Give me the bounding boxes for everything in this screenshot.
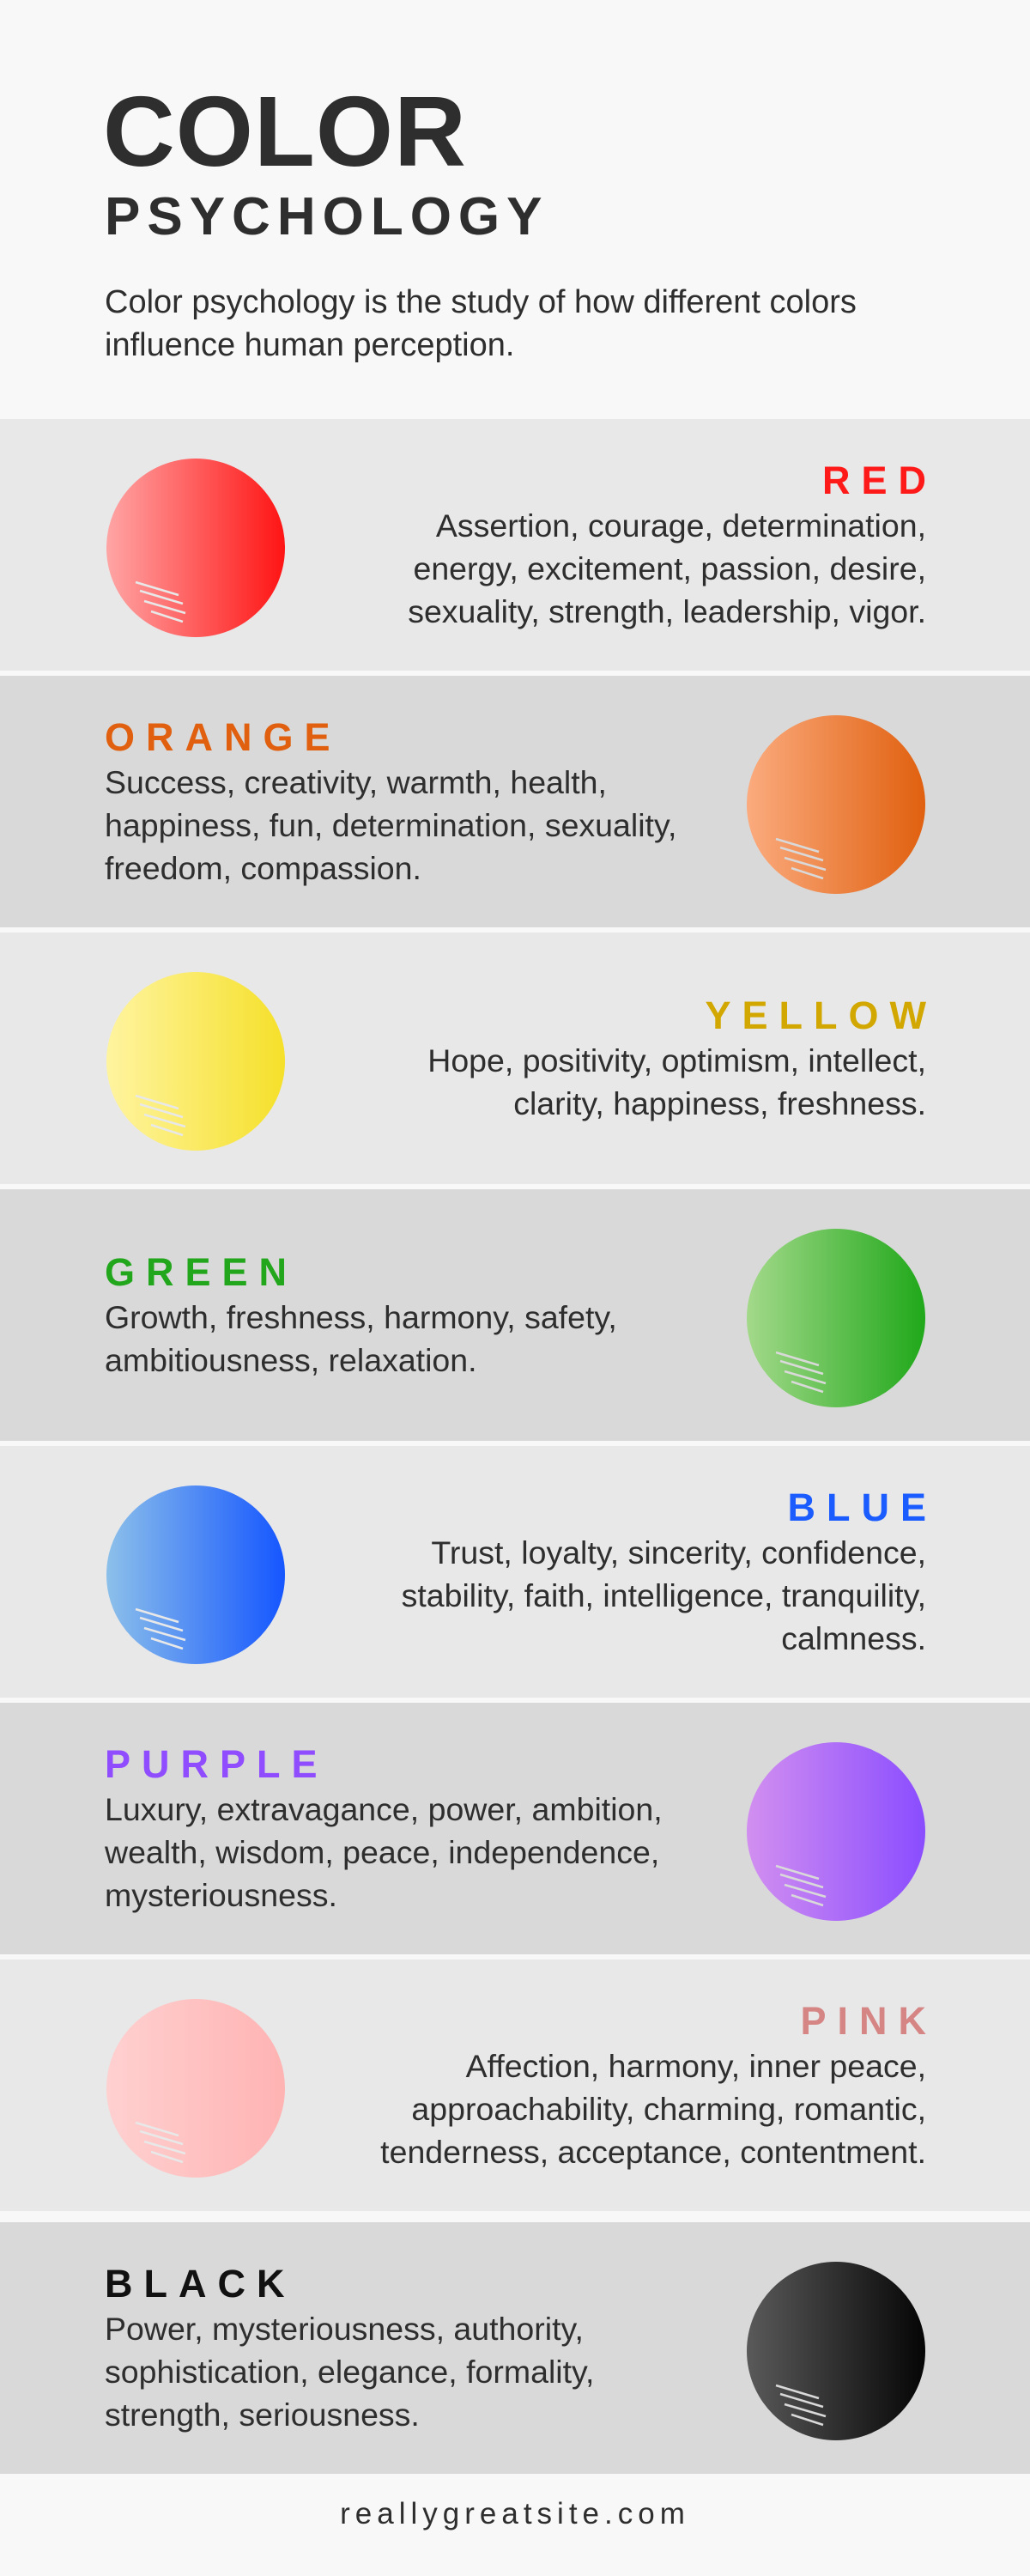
text: blue: calmness. — [781, 1619, 926, 1656]
text: blue: BLUE — [788, 1485, 937, 1528]
text: blue: stability, faith, intelligence, tranquility, — [402, 1577, 926, 1613]
intro text: Color psychology is the study of how different colors — [105, 284, 857, 320]
panel: black — [0, 2222, 1030, 2474]
text: orange: Success, creativity, warmth, health, — [105, 764, 607, 800]
intro text: influence human perception. — [105, 327, 514, 363]
text: blue: Trust, loyalty, sincerity, confidence, — [431, 1534, 926, 1570]
panel: pink — [0, 1959, 1030, 2211]
text: red — [408, 459, 937, 629]
text: orange: freedom, compassion. — [105, 850, 421, 886]
panel: blue — [0, 1446, 1030, 1698]
footer url: reallygreatsite.com — [340, 2497, 690, 2530]
text: pink: tenderness, acceptance, contentment. — [380, 2133, 926, 2169]
text: yellow: Hope, positivity, optimism, intellect, — [427, 1042, 926, 1078]
panel: orange — [0, 676, 1030, 927]
icon: green circle — [747, 1229, 925, 1407]
text: green: GREEN — [105, 1250, 298, 1293]
text: purple: Luxury, extravagance, power, ambition, — [105, 1791, 663, 1827]
text: purple: wealth, wisdom, peace, independence, — [105, 1834, 659, 1870]
text: pink — [380, 1999, 937, 2169]
icon: red circle — [106, 459, 285, 637]
text: red: Assertion, courage, determination, — [436, 507, 926, 543]
text: green: Growth, freshness, harmony, safety, — [105, 1298, 617, 1334]
panel: purple — [0, 1703, 1030, 1954]
icon: black circle — [747, 2262, 925, 2440]
text: blue — [402, 1485, 937, 1656]
text: red: sexuality, strength, leadership, vigor. — [408, 592, 926, 629]
text: orange — [105, 714, 676, 886]
text: pink: Affection, harmony, inner peace, — [466, 2047, 926, 2083]
text: pink: PINK — [800, 1999, 937, 2042]
text: green — [105, 1250, 617, 1377]
text: pink: approachability, charming, romantic, — [411, 2090, 926, 2126]
text: purple: PURPLE — [105, 1741, 329, 1786]
text: red: RED — [822, 459, 937, 501]
text: yellow: clarity, happiness, freshness. — [513, 1085, 926, 1121]
text: yellow — [427, 993, 937, 1121]
panel: red — [0, 419, 1030, 671]
text: green: ambitiousness, relaxation. — [105, 1341, 477, 1377]
text: black: sophistication, elegance, formality, — [105, 2353, 594, 2389]
text: red: energy, excitement, passion, desire, — [413, 550, 926, 586]
text: orange: ORANGE — [105, 714, 342, 759]
panel: green — [0, 1189, 1030, 1441]
icon: pink circle — [106, 1999, 285, 2178]
panel: yellow — [0, 933, 1030, 1184]
text: black: strength, seriousness. — [105, 2396, 420, 2432]
text: black: BLACK — [105, 2262, 295, 2305]
text: black — [105, 2262, 594, 2432]
icon: blue circle — [106, 1485, 285, 1664]
text: black: Power, mysteriousness, authority, — [105, 2310, 584, 2346]
text: orange: happiness, fun, determination, sexuality, — [105, 807, 676, 843]
title: COLOR — [103, 76, 467, 187]
icon: purple circle — [747, 1742, 925, 1921]
subtitle: PSYCHOLOGY — [105, 187, 549, 246]
icon: orange circle — [747, 715, 925, 894]
text: purple: mysteriousness. — [105, 1877, 337, 1913]
intro text — [105, 284, 857, 363]
text: purple — [105, 1741, 663, 1913]
text: yellow: YELLOW — [706, 993, 937, 1037]
icon: yellow circle — [106, 972, 285, 1151]
